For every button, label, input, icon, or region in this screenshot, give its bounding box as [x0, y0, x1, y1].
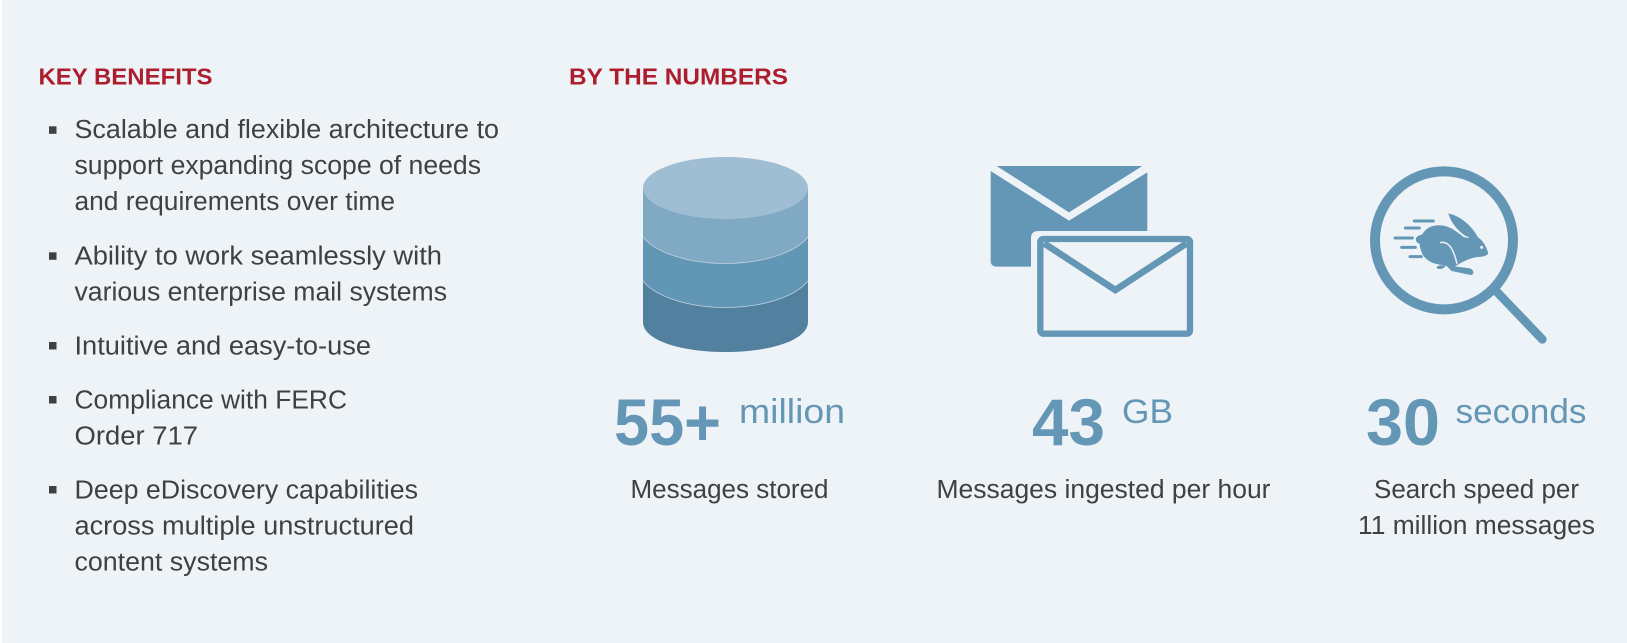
icon: database cylinder: [643, 157, 808, 352]
benefit: scalable architecture: [49, 116, 499, 216]
value: 55+ million: [614, 385, 845, 459]
benefit: FERC compliance: Compliance with FERC: [74, 387, 347, 415]
benefit: mail systems: Ability to work seamlessly with: [74, 242, 442, 270]
benefit: intuitive: Intuitive and easy-to-use: [74, 332, 371, 360]
benefit: mail systems: [49, 242, 447, 306]
benefit: eDiscovery: across multiple unstructured: [74, 513, 414, 541]
benefit: eDiscovery: content systems: [74, 549, 268, 577]
stat: messages ingested: [936, 166, 1271, 504]
heading: by the numbers: BY THE NUMBERS: [569, 64, 788, 90]
icon: envelopes: [991, 166, 1190, 334]
caption: search speed per 11 million messages: 11 million messages: [1358, 512, 1595, 540]
benefit: scalable architecture: and requirements over time: [74, 188, 395, 216]
caption: messages stored: Messages stored: [630, 476, 828, 504]
benefit: FERC compliance: [49, 387, 347, 450]
value: 30 seconds: 30: [1366, 385, 1440, 459]
value: 30 seconds: seconds: [1456, 393, 1586, 431]
benefit: eDiscovery: [49, 477, 418, 577]
value: 43 GB: [1032, 385, 1173, 459]
value: 30 seconds: [1366, 385, 1586, 459]
stat: search speed: [1358, 171, 1595, 540]
caption: messages ingested per hour: Messages ingested per hour: [936, 476, 1271, 504]
value: 43 GB: GB: [1122, 393, 1173, 431]
stat: messages stored: [614, 157, 845, 504]
benefit: eDiscovery: Deep eDiscovery capabilities: [74, 477, 418, 505]
panel: key benefits: [38, 64, 499, 577]
value: 55+ million: 55+: [614, 385, 721, 459]
caption: search speed per 11 million messages: Search speed per: [1374, 476, 1580, 504]
benefit: scalable architecture: support expanding scope of needs: [74, 152, 481, 180]
icon: magnifier with rabbit: [1375, 171, 1542, 339]
benefit: mail systems: various enterprise mail systems: [74, 278, 447, 306]
benefit: FERC compliance: Order 717: [74, 422, 198, 450]
heading: key benefits: KEY BENEFITS: [38, 64, 212, 90]
value: 55+ million: million: [739, 393, 845, 431]
benefit: scalable architecture: Scalable and flexible architecture to: [74, 116, 499, 144]
value: 43 GB: 43: [1032, 385, 1105, 459]
caption: search speed per 11 million messages: [1358, 476, 1595, 540]
